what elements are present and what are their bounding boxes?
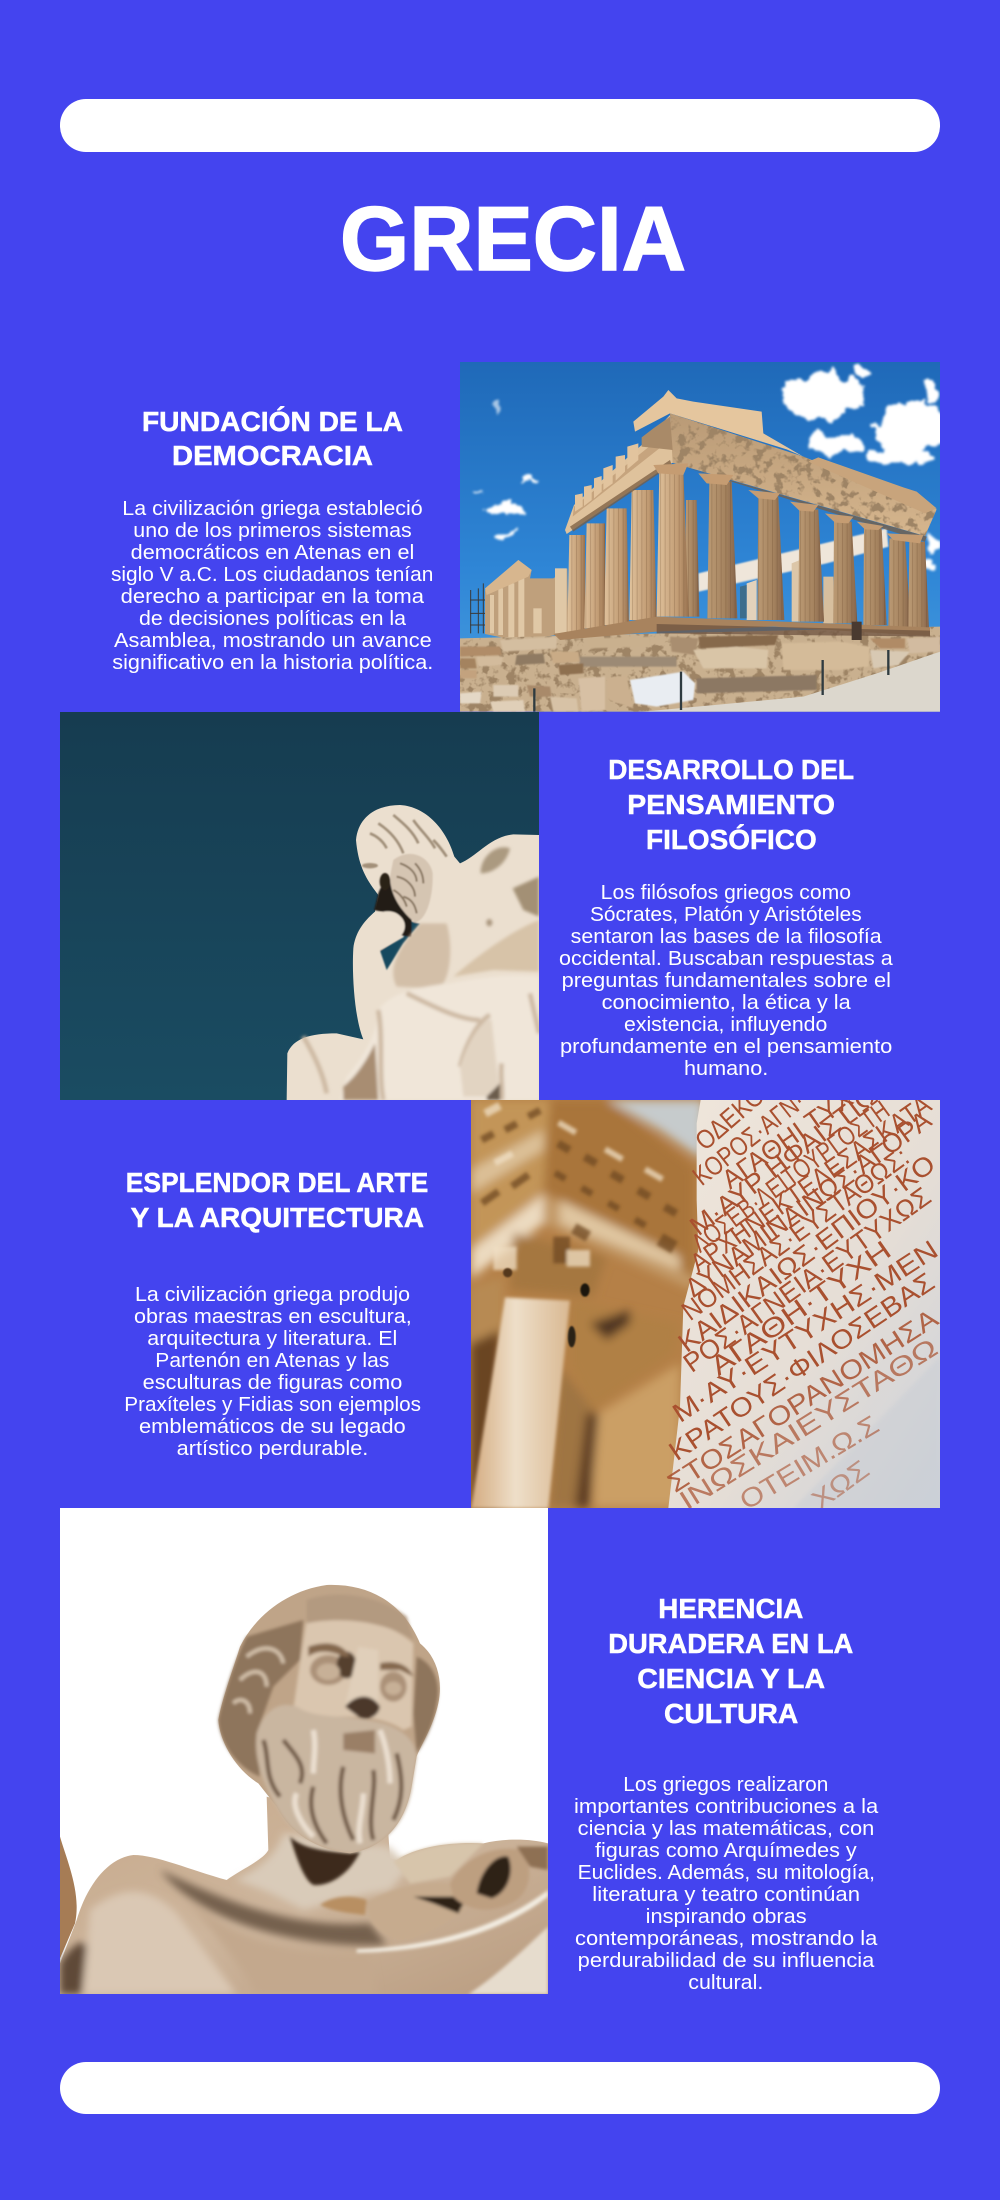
inscription: ΧΩΣ [806, 1454, 875, 1516]
heading: herencia: HERENCIA [658, 1593, 803, 1624]
rubble [460, 635, 940, 712]
text block: herencia: contemporáneas, mostrando la [575, 1928, 878, 1950]
inscription: ΑΓΑΘΗ·ΤΥΧΗ [705, 1235, 897, 1382]
arm gap [380, 922, 420, 970]
text block: desarrollo: humano. [684, 1058, 768, 1080]
text block: desarrollo: profundamente en el pensamiento [560, 1036, 892, 1058]
text block: desarrollo: preguntas fundamentales sobre el [562, 970, 891, 992]
text block: herencia: perdurabilidad de su influencia [578, 1950, 875, 1972]
text block: fundación: significativo en la historia política. [112, 652, 433, 674]
text block: herencia: literatura y teatro continúan [592, 1884, 860, 1906]
eyes [310, 1655, 347, 1685]
blurred ornament [479, 1101, 678, 1272]
beard [390, 854, 433, 923]
text block: desarrollo: Los filósofos griegos como [601, 882, 851, 904]
inscription: ΛΟΣΕΒ·ΛΕΙΤΟΥΡΓΟΣΤΗ [686, 1095, 895, 1258]
heading: desarrollo [608, 754, 854, 855]
hair [370, 815, 447, 857]
text block: esplendor: artístico perdurable. [177, 1438, 368, 1460]
text block: esplendor: La civilización griega produjo [135, 1284, 410, 1306]
inscription [666, 1100, 940, 1508]
heading: desarrollo: PENSAMIENTO [627, 789, 835, 820]
inscription: ΝΟΜΗΣΑΣ·ΕΥΣΤΑΘΩΣ: [676, 1142, 915, 1327]
text block: fundación: Asamblea, mostrando un avance [114, 630, 432, 652]
heading: fundación: FUNDACIÓN DE LA [142, 406, 403, 437]
text block: herencia: Los griegos realizaron [623, 1774, 828, 1796]
text block: fundación: siglo V a.C. Los ciudadanos tenían [111, 564, 433, 586]
text block: herencia: importantes contribuciones a la [574, 1796, 879, 1818]
inscription: Μ·ΑΥΡ ΗΦΑΙΣΤΙΩ [684, 1081, 883, 1241]
text block: desarrollo: Sócrates, Platón y Aristóteles [590, 904, 862, 926]
text block: fundación: democráticos en Atenas en el [131, 542, 414, 564]
inscription: ΣΤΟΣΑΓΟΡΑΝΟΜΗΣΑ [662, 1303, 944, 1498]
heading: desarrollo: FILOSÓFICO [646, 824, 817, 855]
text block: fundación: uno de los primeros sistemas [133, 520, 412, 542]
top white pill [60, 99, 940, 152]
text block: herencia: ciencia y las matemáticas, con [578, 1818, 874, 1840]
ground [460, 627, 940, 712]
back structure [698, 528, 888, 592]
stylobate [553, 617, 930, 640]
text block: esplendor: arquitectura y literatura. El [147, 1328, 397, 1350]
inscription: ΟΤΕΙΜ.Ω.Σ [734, 1409, 884, 1516]
inscription: ΡΟΣ·ΑΓΝΕΙΑ·ΕΥΤΥΧΩΣ [678, 1181, 936, 1378]
title: GRECIA [340, 189, 686, 290]
text block: esplendor [124, 1284, 421, 1460]
text block: fundación [111, 498, 433, 674]
text block: desarrollo: occidental. Buscaban respuestas a [559, 948, 894, 970]
text block: fundación: de decisiones políticas en la [139, 608, 407, 630]
small back temple [485, 560, 568, 641]
drapery [340, 975, 539, 1100]
photo: inscripción griega y columna [471, 1070, 944, 1516]
text block: esplendor: obras maestras en escultura, [134, 1306, 412, 1328]
clouds [469, 364, 945, 570]
heading: desarrollo: DESARROLLO DEL [608, 754, 854, 785]
heading: herencia [608, 1593, 853, 1729]
text block: herencia: cultural. [688, 1972, 763, 1994]
inscription: Μ·ΑΥ·ΕΥΤΥΧΗΣ·ΜΕΝ [667, 1234, 943, 1428]
inscription: ΚΑΙΔΙΚΑΙΩΣ·ΕΠΙΟΥ·ΚΟ [672, 1149, 941, 1358]
text block: desarrollo: conocimiento, la ética y la [602, 992, 852, 1014]
panel: herencia duradera [574, 1593, 879, 1994]
inscription: ΚΟΡΟΣ·ΑΓΝ· [687, 1086, 810, 1191]
panel: esplendor del arte y la arquitectura [124, 1167, 428, 1460]
torso shading [393, 923, 450, 987]
text block: herencia: inspirando obras [646, 1906, 807, 1928]
inscription: ΔΥΝΑΜΙΝΑΙΝΩΣ·ΑΓΟΡΑ [679, 1104, 937, 1303]
heading: fundación [142, 406, 403, 471]
left arm sliver [60, 1837, 77, 1958]
inscription: ΟΔΕΚΟΒ [689, 1070, 782, 1156]
text block: desarrollo: sentaron las bases de la filosofía [571, 926, 883, 948]
heading: esplendor: ESPLENDOR DEL ARTE [126, 1167, 428, 1198]
panel: desarrollo del pensamiento filosófico [559, 754, 894, 1080]
inscription: ΙΝΩΣΚΑΙΕΥΣΤΑΘΩ [674, 1332, 943, 1516]
hair [218, 1620, 303, 1777]
neck and robe [60, 1797, 548, 1994]
text block: esplendor: Partenón en Atenas y las [155, 1350, 389, 1372]
columns [685, 482, 929, 628]
bottom white pill [60, 2062, 940, 2114]
photo: partenón [460, 362, 945, 712]
inscription: ΑΓΑΘΗΙ ΤΥΧΙ [716, 1079, 865, 1195]
figure [287, 805, 539, 1100]
photo: busto de platón [60, 1508, 548, 1995]
text block: desarrollo [559, 882, 894, 1080]
head [218, 1585, 440, 1853]
text block: esplendor: Praxíteles y Fidias son ejemplos [124, 1394, 421, 1416]
text block: herencia: figuras como Arquímedes y [595, 1840, 857, 1862]
text block: herencia [574, 1774, 879, 1994]
heading: herencia: CIENCIA Y LA [637, 1663, 825, 1694]
text block: esplendor: esculturas de figuras como [143, 1372, 402, 1394]
inscription: ΑΡΧΗΝΕΚΤΕΛΕΣΑΣΚΑΤΑ [685, 1089, 937, 1278]
text block: desarrollo: existencia, influyendo [624, 1014, 827, 1036]
heading: herencia: DURADERA EN LA [608, 1628, 853, 1659]
inscription: ΚΡΑΤΟΥΣ·ΦΙΛΟΣΕΒΑΣ [663, 1267, 940, 1467]
marble slab [668, 1100, 940, 1508]
text block: herencia: Euclides. Además, su mitología, [578, 1862, 875, 1884]
face shadows [374, 881, 412, 937]
heading: herencia: CULTURA [664, 1698, 798, 1729]
text block: esplendor: emblemáticos de su legado [139, 1416, 406, 1438]
moustache and beard [256, 1705, 417, 1853]
heading: fundación: DEMOCRACIA [172, 440, 373, 471]
entablature [670, 413, 937, 536]
photo: estatua de sócrates [60, 712, 540, 1102]
heading: esplendor: Y LA ARQUITECTURA [131, 1202, 424, 1233]
hand [358, 911, 405, 952]
heading: esplendor [126, 1167, 428, 1233]
text block: fundación: La civilización griega estableció [122, 498, 423, 520]
text block: fundación: derecho a participar en la toma [121, 586, 425, 608]
panel: fundación de la democracia [111, 406, 433, 674]
